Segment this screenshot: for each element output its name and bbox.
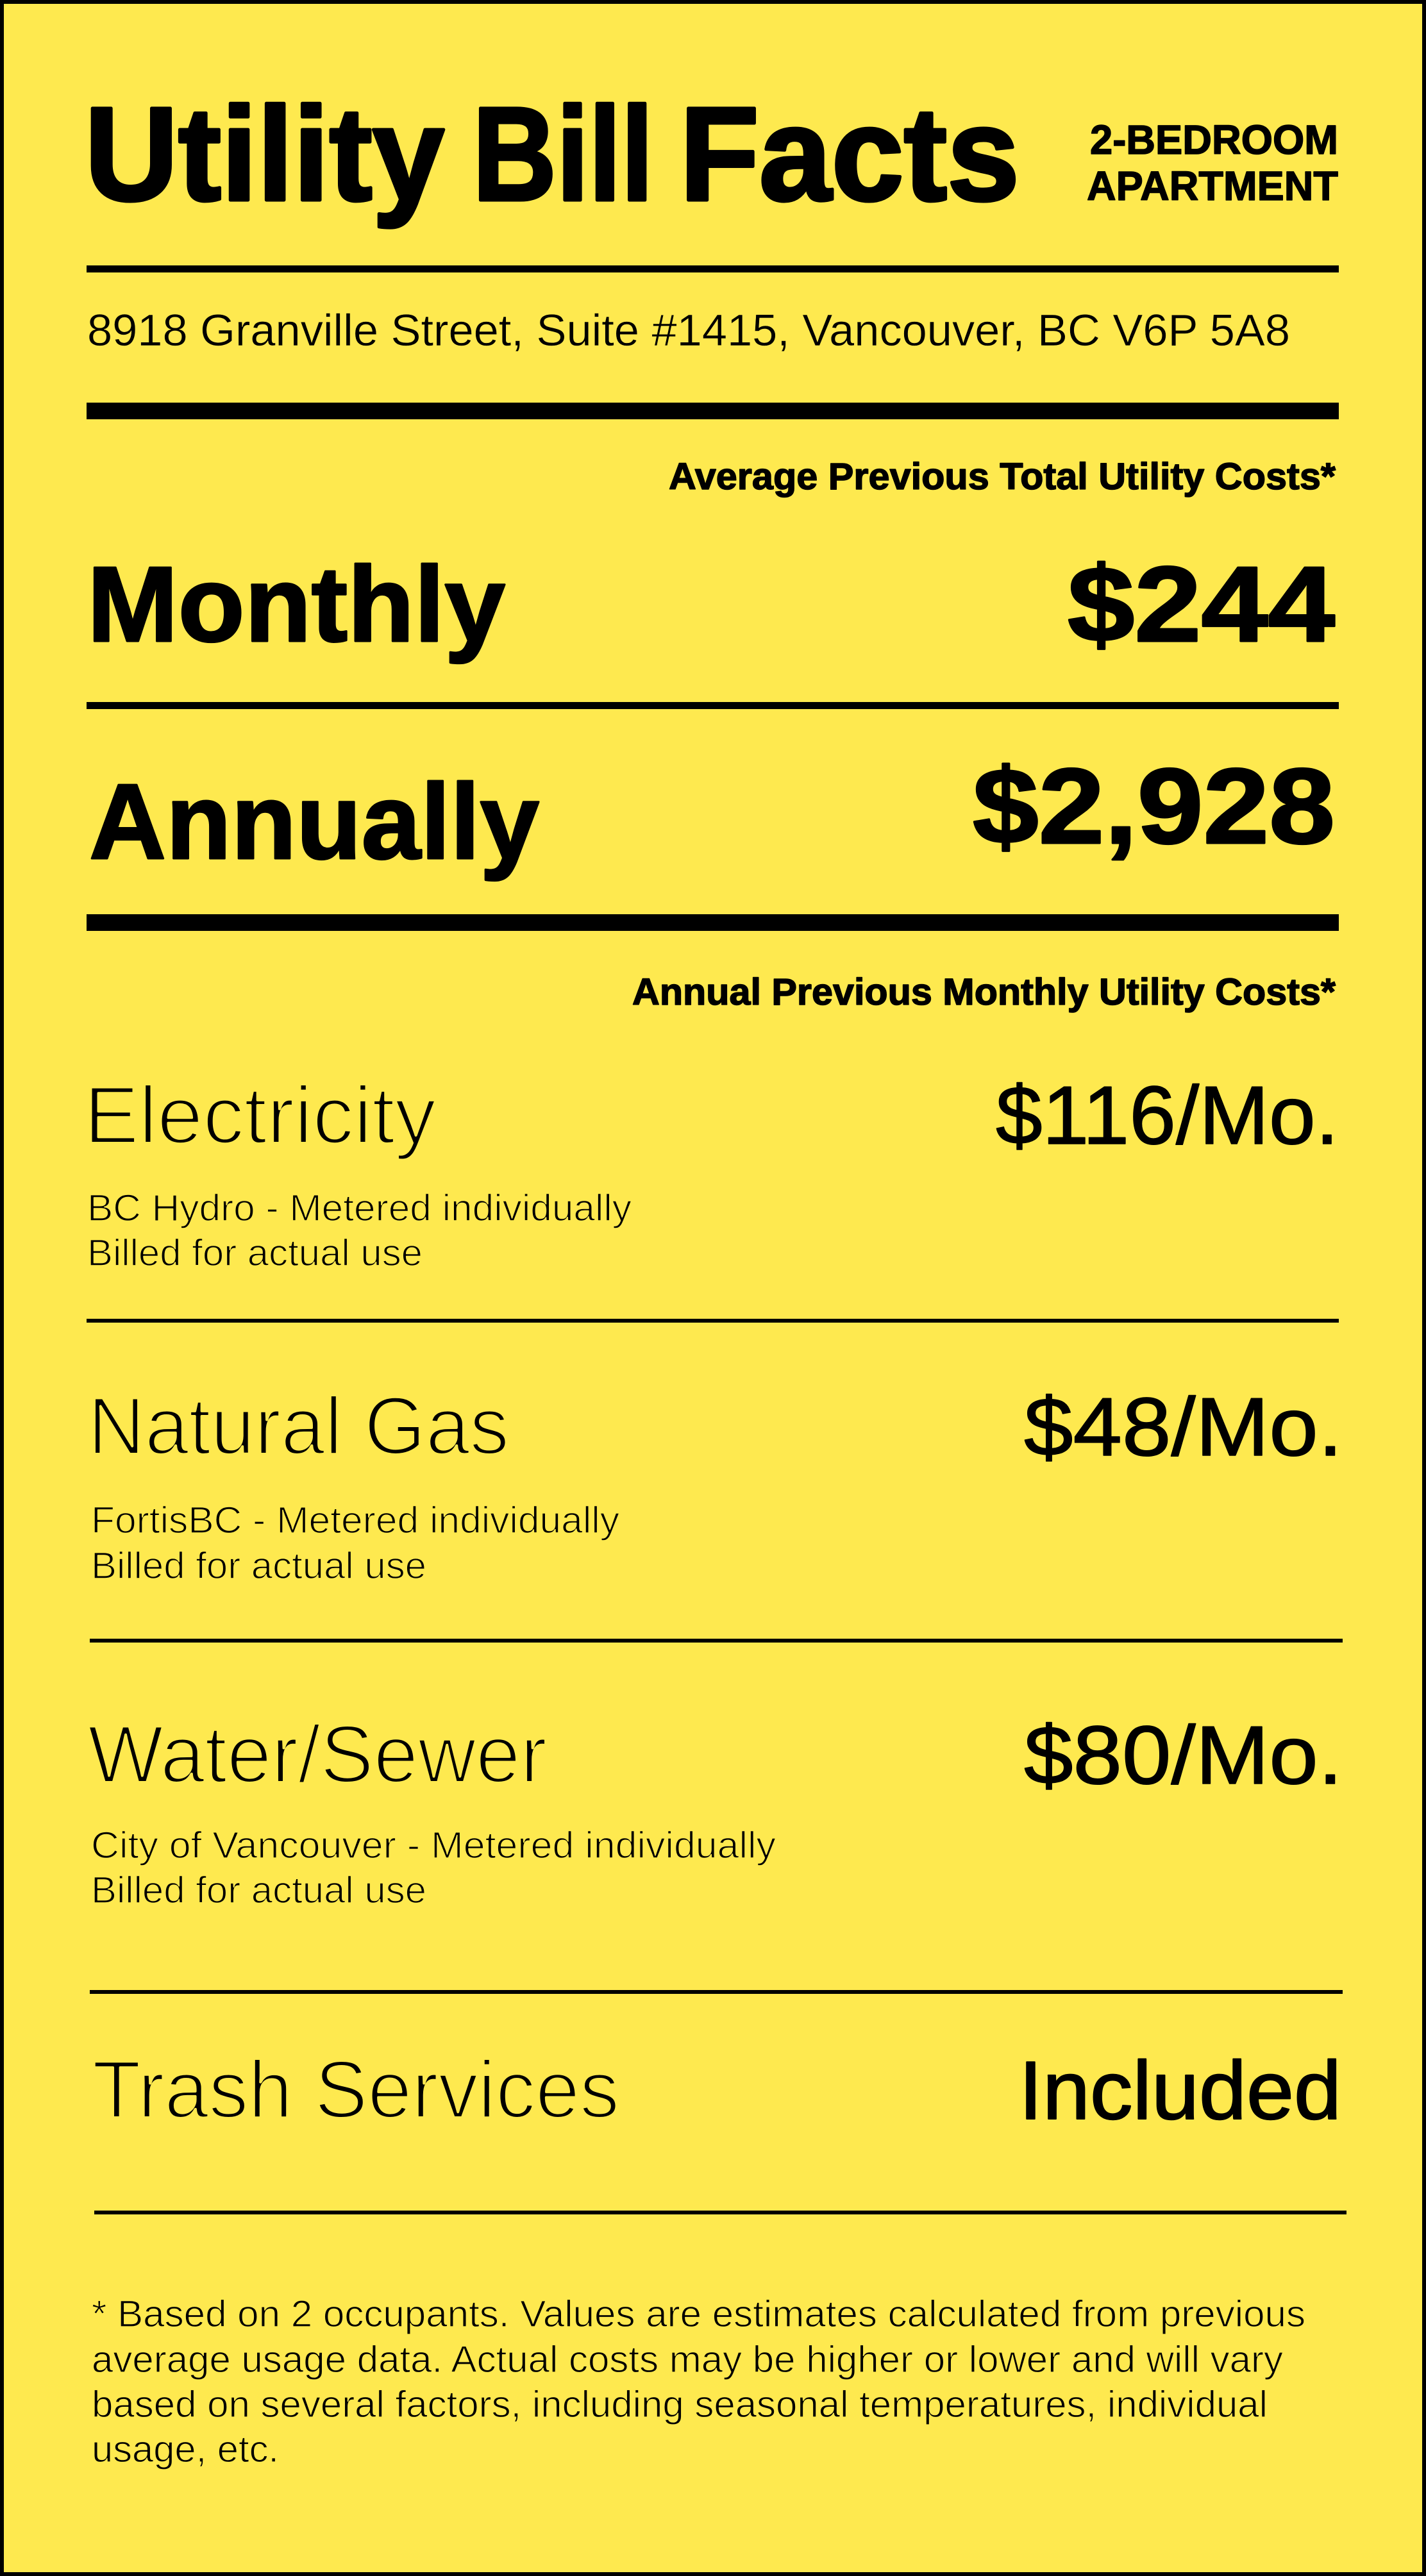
subtitle: apartment type: APARTMENT (1087, 163, 1338, 209)
row: natural gas (88, 1380, 1343, 1587)
footnote: * Based on 2 occupants. Values are estimates calculated from previous (92, 2293, 1305, 2335)
row: annual total (89, 747, 1335, 882)
section heading: average total costs: Average Previous Total Utility Costs* (669, 456, 1336, 498)
subtitle: apartment type: 2-BEDROOM (1090, 117, 1338, 163)
row: electricity: Billed for actual use (87, 1232, 423, 1274)
row: monthly total: $244 (1068, 545, 1335, 664)
footnote: usage, etc. (92, 2429, 279, 2470)
subtitle: apartment type (1087, 117, 1338, 209)
row: electricity: $116/Mo. (996, 1069, 1339, 1162)
section heading: annual monthly costs: Annual Previous Monthly Utility Costs* (632, 971, 1336, 1013)
row: trash services (92, 2044, 1341, 2137)
title: Utility (85, 80, 444, 229)
row: electricity: Electricity (84, 1069, 436, 1160)
title (85, 80, 1019, 229)
title: Facts (680, 80, 1019, 229)
footnote: average usage data. Actual costs may be higher or lower and will vary (92, 2339, 1283, 2380)
row: water and sewer: Billed for actual use (91, 1869, 426, 1911)
panel: itemized utility costs (84, 971, 1346, 2214)
row: monthly total (87, 545, 1335, 664)
title: Bill (473, 80, 653, 229)
row: water and sewer (88, 1709, 1343, 1911)
row: natural gas: FortisBC - Metered individually (91, 1500, 619, 1541)
row: electricity (84, 1069, 1339, 1274)
row: electricity: BC Hydro - Metered individually (87, 1187, 632, 1229)
row: natural gas: Natural Gas (88, 1380, 509, 1471)
row: monthly total: Monthly (87, 545, 505, 664)
row: water and sewer: City of Vancouver - Metered individually (91, 1825, 776, 1866)
row: annual total: Annually (89, 762, 539, 882)
row: natural gas: $48/Mo. (1024, 1381, 1343, 1473)
footnote (92, 2293, 1305, 2470)
row: trash services: Included (1019, 2045, 1341, 2137)
row: water and sewer: Water/Sewer (88, 1709, 547, 1800)
row: annual total: $2,928 (973, 747, 1335, 866)
header (85, 80, 1338, 229)
address: 8918 Granville Street, Suite #1415, Vancouver, BC V6P 5A8 (87, 305, 1290, 355)
row: natural gas: Billed for actual use (91, 1545, 426, 1587)
footnote: based on several factors, including seasonal temperatures, individual (92, 2384, 1268, 2425)
panel: total utility costs (87, 456, 1339, 882)
row: water and sewer: $80/Mo. (1024, 1709, 1343, 1802)
row: trash services: Trash Services (92, 2044, 619, 2135)
